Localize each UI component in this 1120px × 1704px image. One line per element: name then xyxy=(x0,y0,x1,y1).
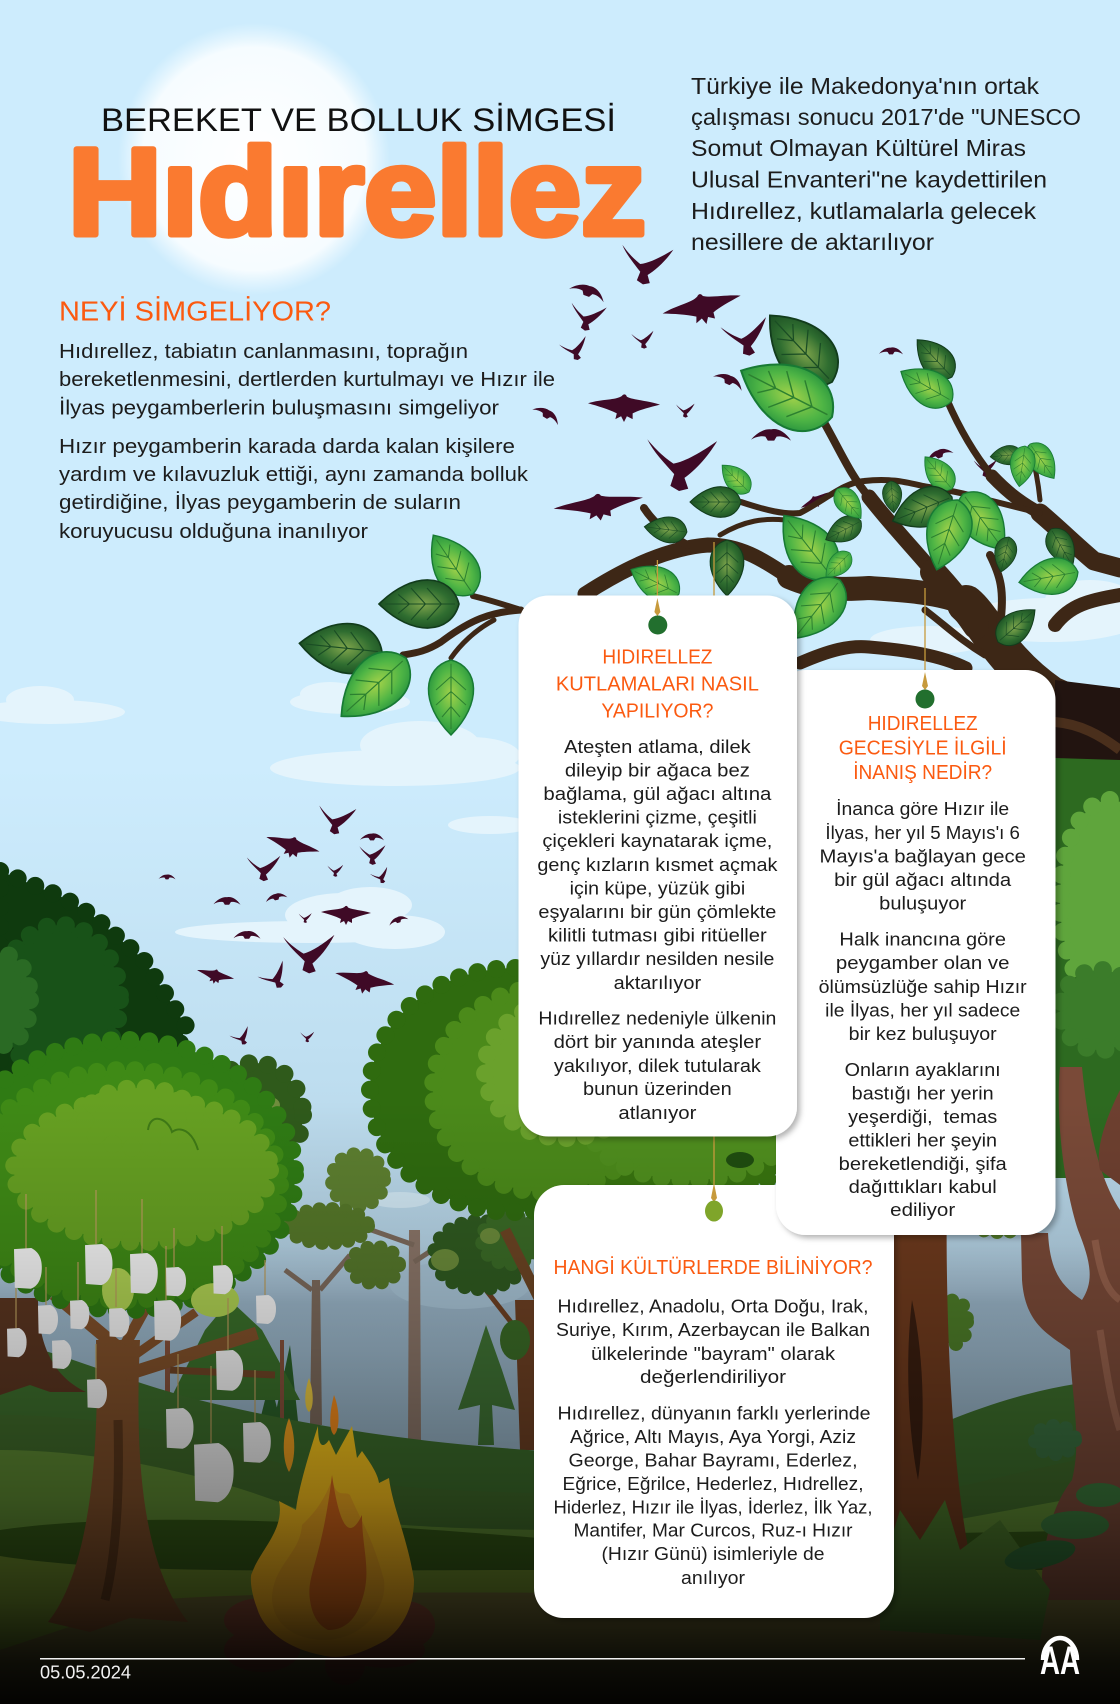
text: card 1: aktarılıyor xyxy=(614,973,701,993)
text: card 3: George, Bahar Bayramı, Ederlez, xyxy=(568,1451,858,1471)
bottom dark gradient overlay xyxy=(0,1100,1120,1704)
text: card 2: bereketlendiği, şifa xyxy=(839,1154,1008,1174)
heading: card 1: KUTLAMALARI NASIL xyxy=(556,674,759,696)
text: card 2 xyxy=(819,799,1027,1220)
foreground plants xyxy=(880,1483,1120,1640)
text: card 2: bir gül ağacı altında xyxy=(834,870,1012,890)
text: card 1: çiçekleri kaynatarak içme, xyxy=(542,831,772,851)
text block: neyi simgeliyor: Hıdırellez, tabiatın canlanmasını, toprağın xyxy=(59,340,468,363)
text: card 3: Suriye, Kırım, Azerbaycan ile Balkan xyxy=(556,1320,870,1340)
text: card 1: bağlama, gül ağacı altına xyxy=(543,784,773,804)
text: card 1: yakılıyor, dilek tutularak xyxy=(554,1056,762,1076)
twisted trunk xyxy=(1021,1067,1120,1600)
heading: card 2: İNANIŞ NEDİR? xyxy=(853,761,992,784)
text: card 1: eşyalarını bir gün çömlekte xyxy=(538,902,776,922)
subtitle: BEREKET VE BOLLUK SİMGESİ xyxy=(101,102,616,138)
text: card 1: isteklerini çizme, çeşitli xyxy=(558,808,757,828)
intro text block: Türkiye ile Makedonya'nın ortak xyxy=(691,73,1040,99)
text: card 2: buluşuyor xyxy=(879,894,966,914)
bead: card 1 xyxy=(648,598,667,634)
bead: card 3 xyxy=(705,1183,723,1222)
text block: neyi simgeliyor: Hızır peygamberin karada darda kalan kişilere xyxy=(59,435,515,458)
text: card 2: Mayıs'a bağlayan gece xyxy=(820,846,1026,866)
panel: hıdırellez gecesiyle ilgili inanış xyxy=(776,670,1056,1235)
text: card 2: yeşerdiği, temas xyxy=(848,1107,997,1127)
strings above the cards xyxy=(714,542,925,1190)
text: card 3: Hıdırellez, Anadolu, Orta Doğu, Irak, xyxy=(558,1296,868,1316)
text: card 3: anılıyor xyxy=(681,1568,745,1588)
heading: card 1 xyxy=(556,647,759,722)
text: card 1: atlanıyor xyxy=(618,1103,696,1123)
text: card 3: Mantifer, Mar Curcos, Ruz-ı Hızır xyxy=(574,1521,852,1541)
intro text block: Somut Olmayan Kültürel Miras xyxy=(691,135,1026,161)
footer rule xyxy=(40,1658,1025,1660)
intro text block: nesillere de aktarılıyor xyxy=(691,229,934,255)
text: card 3: Hıdırellez, dünyanın farklı yerlerinde xyxy=(558,1404,870,1424)
wish tags xyxy=(7,1244,276,1502)
clouds xyxy=(0,580,1120,949)
text: card 1: genç kızların kısmet açmak xyxy=(537,855,778,875)
heading: neyi simgeliyor: NEYİ SİMGELİYOR? xyxy=(59,296,331,327)
text: card 1: Ateşten atlama, dilek xyxy=(564,737,752,757)
text: card 2: ettikleri her şeyin xyxy=(848,1130,997,1150)
tree canopy at top right xyxy=(297,297,1120,760)
background small forest trees xyxy=(165,1154,545,1450)
text: card 3: ülkelerinde "bayram" olarak xyxy=(591,1344,836,1364)
heading: card 1: YAPILIYOR? xyxy=(601,700,713,722)
text: card 3: değerlendiriliyor xyxy=(640,1367,786,1387)
wish tags and strings xyxy=(16,1190,265,1443)
text: card 2: ediliyor xyxy=(890,1200,955,1220)
birds: lower flock xyxy=(158,804,408,1049)
distant hazy cloud band xyxy=(370,1192,530,1309)
right side background tree foliage xyxy=(943,758,1120,1344)
text: card 1: bunun üzerinden xyxy=(583,1079,732,1099)
intro text block: Hıdırellez, kutlamalarla gelecek xyxy=(691,198,1037,224)
text block: neyi simgeliyor: getirdiğine, İlyas peygamberin de suların xyxy=(59,491,461,514)
text: card 1: için küpe, yüzük gibi xyxy=(570,878,745,898)
text: card 1: kilitli tutması gibi ritüeller xyxy=(548,926,767,946)
hills xyxy=(0,1340,1120,1704)
heading: card 1: HIDIRELLEZ xyxy=(602,647,712,669)
text: card 1 xyxy=(537,737,778,1123)
text: card 2: İlyas, her yıl 5 Mayıs'ı 6 xyxy=(825,823,1020,843)
middle dark tree crown xyxy=(207,1063,303,1167)
sun glow xyxy=(118,23,390,295)
text: card 3: Eğrice, Eğrilce, Hederlez, Hıdrellez, xyxy=(562,1474,864,1494)
heading: card 3: HANGİ KÜLTÜRLERDE BİLİNİYOR? xyxy=(554,1256,872,1279)
text block: neyi simgeliyor: bereketlenmesini, dertlerden kurtulmayı ve Hızır ile xyxy=(59,368,555,391)
text: card 2: İnanca göre Hızır ile xyxy=(836,799,1009,819)
text: card 3: Hiderlez, Hızır ile İlyas, İderlez, İlk Yaz, xyxy=(554,1498,872,1518)
text block: neyi simgeliyor xyxy=(59,340,555,543)
heading: card 2: GECESİYLE İLGİLİ xyxy=(839,736,1007,760)
text block: neyi simgeliyor: yardım ve kılavuzluk ettiği, aynı zamanda bolluk xyxy=(59,463,529,486)
text: card 2: Onların ayaklarını xyxy=(845,1060,1001,1080)
left big tree crown xyxy=(0,1040,295,1317)
text: card 1: yüz yıllardır nesilden nesile xyxy=(540,949,774,969)
text: card 1: dört bir yanında ateşler xyxy=(554,1032,761,1052)
text: card 2: dağıttıkları kabul xyxy=(849,1177,997,1197)
intro text block xyxy=(691,73,1081,255)
text block: neyi simgeliyor: koruyucusu olduğuna inanılıyor xyxy=(59,520,368,543)
text: card 2: ölümsüzlüğe sahip Hızır xyxy=(819,977,1027,997)
text: card 2: ile İlyas, her yıl sadece xyxy=(825,1001,1020,1021)
text: card 3: (Hızır Günü) isimleriyle de xyxy=(602,1544,824,1564)
birds: upper flock xyxy=(532,243,997,527)
text: card 1: Hıdırellez nedeniyle ülkenin xyxy=(538,1009,776,1029)
panel: hıdırellez kutlamaları xyxy=(518,560,797,1136)
trunk: background left tree xyxy=(0,1298,86,1395)
date: 05.05.2024 xyxy=(40,1663,131,1683)
left dark tree crown xyxy=(0,871,186,1130)
heading: card 2 xyxy=(839,713,1007,784)
panel: hangi kültürlerde biliniyor xyxy=(534,1183,894,1618)
text: card 2: bir kez buluşuyor xyxy=(849,1024,997,1044)
tree with wish tags xyxy=(48,1287,275,1632)
heading: card 2: HIDIRELLEZ xyxy=(868,713,978,735)
central big tree crown xyxy=(370,968,810,1300)
text block: neyi simgeliyor: İlyas peygamberlerin buluşmasını simgeliyor xyxy=(59,396,499,420)
intro text block: çalışması sonucu 2017'de "UNESCO xyxy=(691,104,1081,130)
text: card 3 xyxy=(554,1296,872,1588)
bead: card 2 xyxy=(916,672,934,708)
campfire xyxy=(224,1378,435,1685)
text: card 2: Halk inancına göre xyxy=(839,930,1006,950)
text: card 3: Ağrice, Altı Mayıs, Aya Yorgi, Aziz xyxy=(570,1427,856,1447)
logo: AA: AA xyxy=(1040,1639,1080,1683)
text: card 2: peygamber olan ve xyxy=(836,953,1010,973)
logo: AA xyxy=(1040,1638,1080,1683)
title: Hıdırellez xyxy=(68,124,646,262)
text: card 1: dileyip bir ağaca bez xyxy=(565,761,750,781)
intro text block: Ulusal Envanteri"ne kaydettirilen xyxy=(691,166,1047,192)
text: card 2: bastığı her yerin xyxy=(852,1084,994,1104)
central brown trunk xyxy=(880,1180,975,1580)
